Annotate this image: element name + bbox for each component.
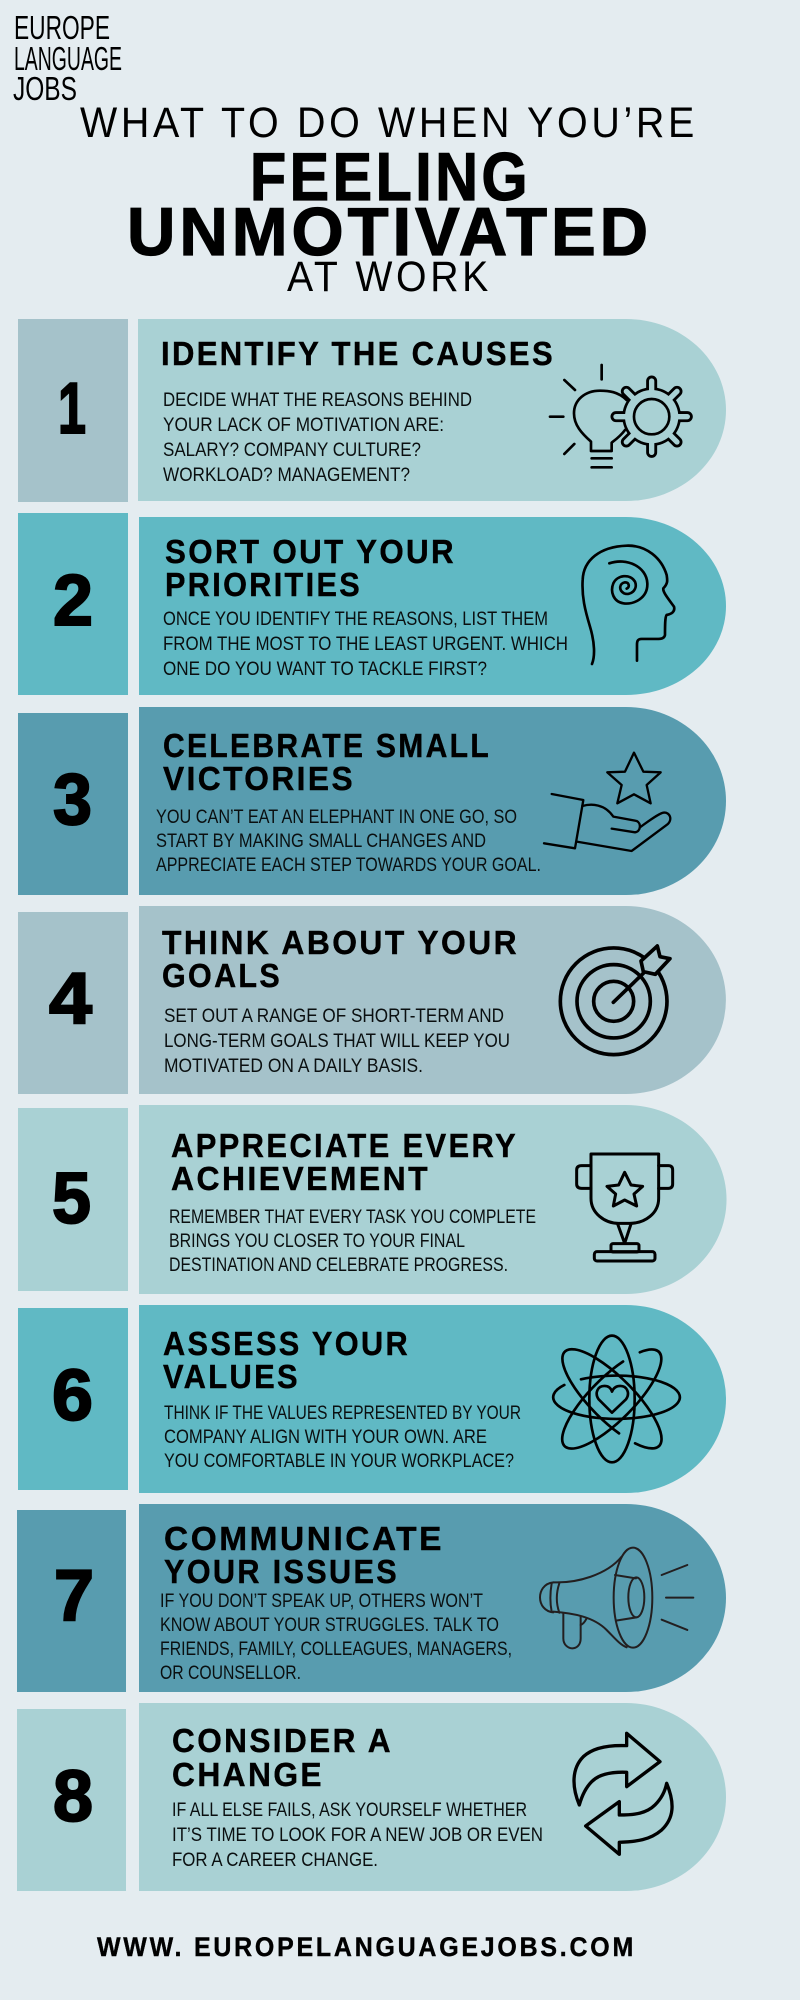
panel: step 8 consider a change: CONSIDER A — [172, 1722, 393, 1759]
panel: step 8 consider a change: IF ALL ELSE FAILS, ASK YOURSELF WHETHER — [172, 1800, 527, 1821]
panel: step 2 sort out your priorities: 2 — [53, 561, 93, 641]
title: AT WORK — [287, 253, 492, 301]
panel: step 6 assess your values: THINK IF THE VALUES REPRESENTED BY YOUR — [164, 1403, 521, 1424]
panel: step 5 appreciate every achievement: ACHIEVEMENT — [171, 1160, 430, 1197]
panel: step 6 assess your values: ASSESS YOUR — [163, 1325, 410, 1362]
logo: JOBS — [13, 70, 77, 107]
panel: step 3 celebrate small victories: START BY MAKING SMALL CHANGES AND — [156, 831, 486, 852]
logo — [13, 9, 122, 107]
panel: step 5 appreciate every achievement: REMEMBER THAT EVERY TASK YOU COMPLETE — [169, 1207, 536, 1228]
panel: step 2 sort out your priorities: ONE DO YOU WANT TO TACKLE FIRST? — [163, 659, 487, 680]
panel: step 7 communicate your issues: YOUR ISSUES — [164, 1553, 399, 1590]
panel: step 8 consider a change — [17, 1703, 726, 1891]
panel: step 7 communicate your issues — [17, 1504, 726, 1692]
panel: step 6 assess your values: VALUES — [163, 1358, 300, 1395]
panel: step 2 sort out your priorities: FROM THE MOST TO THE LEAST URGENT. WHICH — [163, 634, 568, 655]
panel: step 1 identify the causes: IDENTIFY THE CAUSES — [161, 335, 555, 372]
panel: step 7 communicate your issues: 7 — [54, 1556, 94, 1636]
panel: step 7 communicate your issues: IF YOU DON’T SPEAK UP, OTHERS WON’T — [160, 1591, 483, 1612]
panel: step 4 think about your goals: SET OUT A RANGE OF SHORT-TERM AND — [164, 1006, 504, 1027]
panel: step 5 appreciate every achievement: APPRECIATE EVERY — [171, 1127, 518, 1164]
icon: trophy — [577, 1154, 673, 1261]
panel: step 8 consider a change: 8 — [53, 1757, 93, 1837]
panel: step 5 appreciate every achievement: DESTINATION AND CELEBRATE PROGRESS. — [169, 1255, 508, 1276]
panel: step 5 appreciate every achievement — [18, 1105, 727, 1294]
icon: megaphone — [540, 1548, 693, 1648]
panel: step 8 consider a change: IT’S TIME TO LOOK FOR A NEW JOB OR EVEN — [172, 1825, 543, 1846]
panel: step 3 celebrate small victories: VICTORIES — [163, 760, 355, 797]
panel: step 2 sort out your priorities: SORT OUT YOUR — [165, 533, 456, 570]
panel: step 1 identify the causes: YOUR LACK OF MOTIVATION ARE: — [163, 415, 444, 436]
panel: step 6 assess your values: COMPANY ALIGN WITH YOUR OWN. ARE — [164, 1427, 487, 1448]
icon: head with spiral — [582, 546, 674, 664]
panel: step 1 identify the causes — [18, 319, 726, 502]
title: FEELING — [250, 139, 531, 215]
panel: step 7 communicate your issues: KNOW ABOUT YOUR STRUGGLES. TALK TO — [160, 1615, 499, 1636]
panel: step 3 celebrate small victories: APPRECIATE EACH STEP TOWARDS YOUR GOAL. — [156, 855, 541, 876]
panel: step 3 celebrate small victories: CELEBRATE SMALL — [163, 727, 491, 764]
panel: step 7 communicate your issues: FRIENDS, FAMILY, COLLEAGUES, MANAGERS, — [160, 1639, 512, 1660]
panel: step 6 assess your values: 6 — [52, 1356, 93, 1436]
panel: step 4 think about your goals — [18, 906, 726, 1094]
panel: step 8 consider a change: CHANGE — [172, 1756, 324, 1793]
icon: light bulb and gear — [550, 365, 687, 467]
icon: target with arrow — [560, 946, 670, 1055]
title: WHAT TO DO WHEN YOU’RE — [80, 99, 698, 147]
panel: step 1 identify the causes: WORKLOAD? MANAGEMENT? — [163, 465, 410, 486]
title — [80, 99, 698, 301]
panel: step 7 communicate your issues: OR COUNSELLOR. — [160, 1663, 301, 1684]
panel: step 2 sort out your priorities: ONCE YOU IDENTIFY THE REASONS, LIST THEM — [163, 609, 548, 630]
panel: step 3 celebrate small victories: 3 — [53, 760, 92, 840]
panel: step 6 assess your values — [18, 1305, 726, 1493]
panel: step 1 identify the causes: SALARY? COMPANY CULTURE? — [163, 440, 421, 461]
title: UNMOTIVATED — [127, 194, 652, 270]
logo: LANGUAGE — [14, 40, 122, 77]
panel: step 7 communicate your issues: COMMUNICATE — [164, 1520, 444, 1557]
panel: step 1 identify the causes: 1 — [58, 369, 86, 449]
panel: step 4 think about your goals: GOALS — [162, 957, 282, 994]
panel: step 4 think about your goals: LONG-TERM GOALS THAT WILL KEEP YOU — [164, 1031, 510, 1052]
panel: step 5 appreciate every achievement: 5 — [52, 1159, 91, 1239]
panel: step 6 assess your values: YOU COMFORTABLE IN YOUR WORKPLACE? — [164, 1451, 514, 1472]
panel: step 2 sort out your priorities — [18, 513, 726, 695]
panel: step 3 celebrate small victories — [18, 707, 726, 895]
panel: step 8 consider a change: FOR A CAREER CHANGE. — [172, 1850, 378, 1871]
panel: step 5 appreciate every achievement: BRINGS YOU CLOSER TO YOUR FINAL — [169, 1231, 465, 1252]
footer website address: WWW. EUROPELANGUAGEJOBS.COM — [97, 1932, 636, 1962]
logo: EUROPE — [14, 9, 110, 46]
icon: hand holding star — [544, 753, 670, 851]
icon: two circular arrows — [574, 1733, 672, 1854]
panel: step 4 think about your goals: 4 — [49, 959, 92, 1039]
panel: step 3 celebrate small victories: YOU CAN’T EAT AN ELEPHANT IN ONE GO, SO — [156, 807, 517, 828]
panel: step 2 sort out your priorities: PRIORITIES — [165, 566, 362, 603]
panel: step 1 identify the causes: DECIDE WHAT THE REASONS BEHIND — [163, 390, 472, 411]
icon: atom with heart — [549, 1336, 680, 1462]
panel: step 4 think about your goals: MOTIVATED ON A DAILY BASIS. — [164, 1056, 423, 1077]
panel: step 4 think about your goals: THINK ABOUT YOUR — [162, 924, 519, 961]
